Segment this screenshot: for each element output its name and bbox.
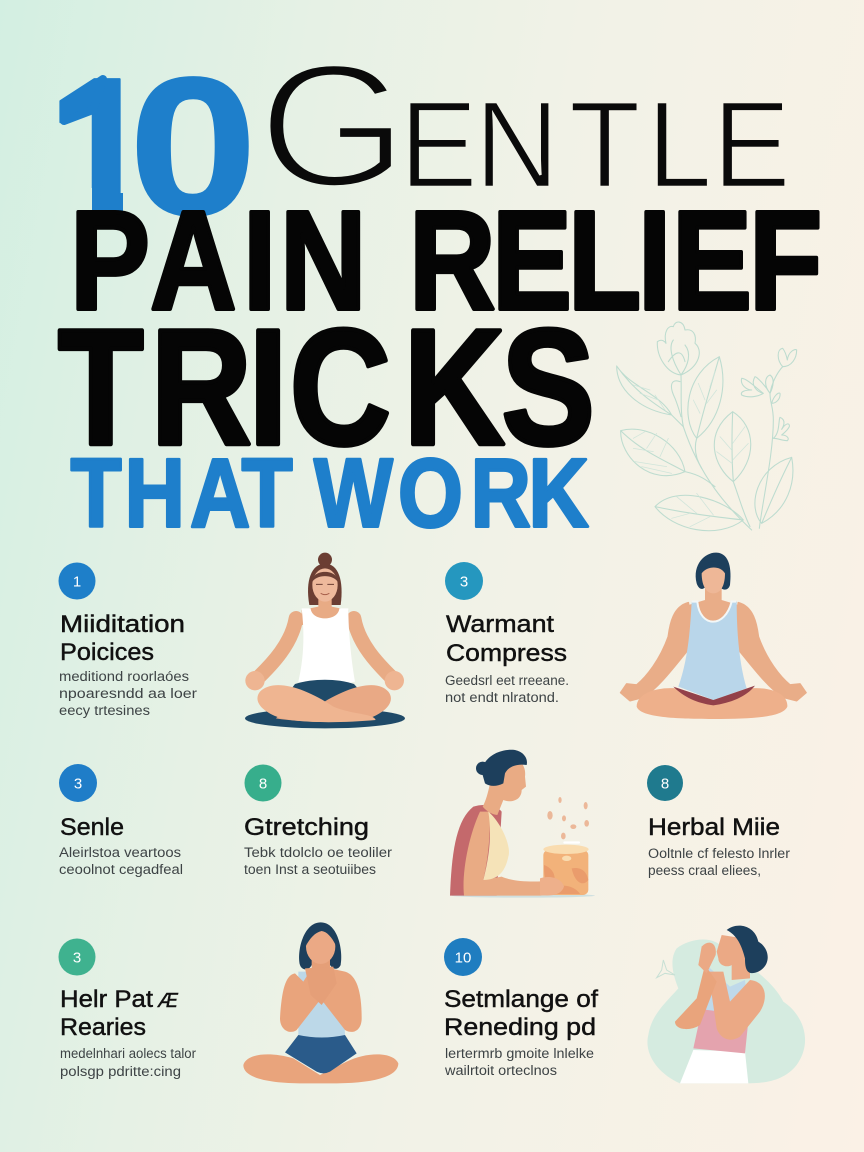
title: PAIN RELIEF: PAIN RELIEF [70,182,822,339]
badge 8 [647,765,683,801]
badge 8 [244,764,282,802]
body text: Geedsrl eet rreeane. [445,673,569,688]
body text [648,846,791,878]
body text [445,673,569,705]
badge 10: 10 [455,950,471,966]
body text: Aleirlstoa veartoos [59,845,181,860]
title: number 10 [59,75,249,216]
heading [446,611,567,667]
body text [244,845,393,877]
panel: tip 2 warm compress [445,553,806,719]
heading: Herbal Miie [648,814,780,841]
body text [444,1046,594,1078]
body text: wailrtoit orteclnos [444,1063,557,1078]
heading [444,986,598,1041]
badge 3: 3 [460,574,468,590]
heading [60,611,185,666]
heading: Helr Pat [60,986,153,1013]
body text: meditiond roorlaóes [59,669,189,684]
title: number 10: 1 [47,37,156,256]
title [58,66,820,529]
panel: tip 4 stretching [244,764,393,877]
panel: tip 7 setmlange [444,926,805,1083]
panel: tip 3 senle [59,764,183,877]
figure: woman seated in light blue tank [621,553,806,719]
panel: tip 6 helr pat [58,922,398,1083]
badge 8: 8 [259,776,267,792]
title: TRICKS: TRICKS [58,295,595,480]
body text: medelnhari aolecs talor [60,1046,196,1061]
heading: Rearies [60,1014,146,1041]
icon: botanical line drawing [617,322,797,531]
body text [59,669,198,718]
panel: tip 1 meditation [58,553,405,728]
badge 3 [445,562,483,600]
body text: Tebk tdolclo oe teoliler [244,845,393,860]
figure: woman holding a warm herbal jar [450,750,595,898]
figure: woman with hands to face and mint blob [647,926,805,1083]
heading: Æ [157,990,179,1012]
body text: lertermrb gmoite lnlelke [445,1046,594,1061]
body text: polsgp pdritte:cing [60,1064,181,1079]
heading: Poicices [60,639,154,666]
body text [59,845,183,877]
badge 3: 3 [74,776,82,792]
badge 8: 8 [661,776,669,792]
body text: peess craal eliees, [648,863,761,878]
badge 3 [58,938,96,976]
heading: Reneding pd [444,1014,596,1041]
heading: Compress [446,640,567,667]
badge 3: 3 [73,950,81,966]
body text: ceoolnot cegadfeal [59,862,183,877]
title: large letter G: G [258,29,408,224]
body text: eecy trtesines [59,703,150,718]
heading: Warmant [446,611,554,638]
body text: npoaresndd aa loer [59,686,198,701]
badge 1: 1 [73,574,81,590]
body text: Ooltnle cf felesto lnrler [648,846,791,861]
body text [60,1046,196,1079]
badge 10 [444,938,482,976]
title: ENTLE: ENTLE [400,76,791,214]
heading [60,986,179,1041]
heading: Gtretching [244,814,369,841]
figure: woman seated with palms together [243,922,398,1083]
heading: Setmlange of [444,986,598,1013]
title: THAT WORK: THAT WORK [71,440,589,548]
panel: tip 5 herbal [647,765,791,878]
title: number 10: 0 [129,37,257,256]
body text: toen Inst a seotuiibes [244,862,376,877]
heading: Miiditation [60,611,185,638]
heading: Senle [60,814,124,841]
figure: woman meditating on navy mat [245,553,405,728]
body text: not endt nlratond. [445,690,559,705]
badge 1 [58,562,96,600]
